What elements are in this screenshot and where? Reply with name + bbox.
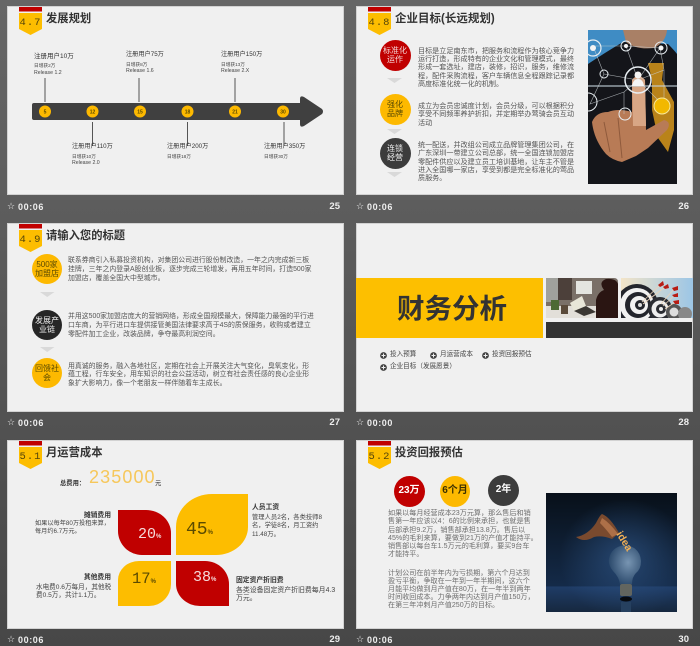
bullet: investment budget: 投入预算 (390, 351, 416, 358)
text: standardised operation: 程，配件采购流程，客户车辆信息全程跟踪记录都 (418, 72, 574, 80)
footer: slide 27: 00:06 (18, 418, 44, 428)
text: plan: 月能平均做到月产值在80万，在一年半到两年 (388, 585, 531, 593)
section badge 5.2 (368, 441, 392, 469)
petal: 45% (176, 494, 248, 555)
timeline arrow: 18 (185, 110, 190, 116)
panel: slide 26 corporate goals (356, 6, 693, 195)
text: break-even: 后部承担9.2万，销售部承担13.8万。售后以 (388, 526, 525, 534)
timeline arrow: 21 (232, 110, 238, 116)
milestone: 75万: 注册用户75万 (126, 51, 164, 58)
section badge 4.8 (368, 7, 391, 35)
heading: financial analysis: 财务分析 (397, 293, 507, 324)
milestone: 110万 (72, 142, 113, 166)
text: plan: 在第三年冲刺月产值250万的目标。 (388, 601, 499, 609)
circle: industry chain: 发展产 (35, 316, 59, 324)
milestone: 200万 (167, 142, 208, 159)
text: depreciation: 各类设备固定资产折旧费每月4.3 (236, 587, 335, 594)
section badge 5.1 (19, 441, 42, 469)
milestone: 75万: Release 1.6 (126, 68, 154, 74)
text: break-even (388, 509, 538, 558)
milestone: 10万: 日增获2万 (34, 63, 55, 68)
text: standardised operation: 运行打造，形成特有的企业文化和管理模式，最终 (418, 55, 574, 63)
text: other costs: 其他费用 (84, 574, 111, 581)
text: salaries: 管理人员2名，各类技师8 (252, 514, 322, 521)
text: amortisation: 如果以每年80万投租来算， (35, 520, 110, 527)
circle: 500 stores (32, 254, 62, 284)
circle: 2年: 2年 (496, 484, 511, 495)
footer: slide 29: 00:06 (18, 635, 44, 645)
milestone: 350万 (264, 142, 305, 159)
petal: 17% (118, 561, 170, 606)
text: brand: 享受不同频率养护折扣，并定期举办莺骑会员互动 (418, 110, 574, 118)
text: break-even: 如果以每月经营成本23万元算，那么售后和销 (388, 509, 531, 517)
panel: slide 30 return estimate (356, 440, 693, 629)
photo: idea light bulb: idea (613, 529, 635, 554)
footer: slide 30 (356, 634, 693, 646)
text: break-even: 售第一年应该以4：6的比例来承担，也就是售 (388, 517, 531, 525)
milestone: 75万: 日增获8万 (126, 62, 147, 67)
text: depreciation (236, 576, 335, 602)
circle: 6个月: 6个月 (442, 485, 468, 496)
heading: 投资回报预估 (395, 447, 463, 459)
total cost figure: 总费用： (60, 480, 85, 487)
photo: hand touching network (588, 30, 677, 184)
circle: chain (380, 138, 410, 168)
footer: slide 30: 30 (678, 634, 689, 645)
text: standardised operation (418, 46, 574, 88)
footer: slide 26 (356, 201, 689, 212)
timeline arrow: 12 (90, 110, 95, 116)
text: 500 stores: 加盟店，覆盖全国大中型城市。 (68, 275, 164, 282)
footer: slide 25: 00:06 (18, 202, 44, 212)
footer: slide 26: 00:06 (367, 202, 393, 212)
text: chain: 广东深圳一带建立公司总部，统一全国连锁加盟店 (418, 149, 574, 157)
milestone: 150万: 日增获13万 (221, 62, 245, 67)
panel: slide 27 (7, 223, 344, 412)
text: chain: 零配件供应以及建立员工培训基地，让车主不管是 (418, 158, 574, 166)
text: salaries: 名，学徒8名，月工资约 (252, 522, 318, 529)
section badge 5.1: 5.1 (20, 451, 41, 463)
timeline arrow: 30 (280, 110, 286, 116)
value: 17%: 17% (132, 570, 156, 588)
photo: archery targets (621, 278, 693, 318)
photo: working on laptop (546, 278, 618, 318)
photo: idea light bulb (546, 493, 677, 612)
text: plan: 盈亏平衡，争取在一年到一年半期间，这六个 (388, 577, 530, 585)
footer: slide 28: 00:00 (367, 418, 393, 428)
section badge 4.9 (19, 224, 42, 252)
footer: slide 29: 29 (329, 634, 340, 645)
footer: slide 28: ☆ (356, 418, 364, 428)
circle: chain: 经营 (387, 153, 403, 162)
footer: slide 27 (7, 417, 340, 428)
bullet: return estimate (482, 350, 532, 359)
text: standardised operation: 形成一套选址，建店，装修，招识，服务，维修流 (418, 63, 574, 71)
bullet: monthly cost (430, 350, 473, 359)
section badge 5.2: 5.2 (369, 451, 390, 463)
text: break-even: 才能持平。 (388, 550, 423, 558)
agenda list (380, 350, 532, 371)
text: other costs: 水电费0.6万每月，其他税 (36, 584, 111, 591)
text: industry chain: 并用这500家加盟店庞大的营销网络，形成全国规模最大，保障能力最强的平行进 (68, 313, 314, 320)
circle: brand: 品牌 (387, 109, 403, 118)
milestone: 200万: 日增获18万 (167, 154, 191, 159)
circle: community: 会 (43, 373, 51, 382)
circle: brand: 强化 (387, 100, 403, 108)
circle: 23万 (394, 476, 424, 506)
circle: 6个月 (440, 476, 470, 506)
milestone: 150万: 注册用户150万 (221, 51, 262, 58)
text: amortisation: 每月约6.7万元。 (35, 528, 81, 535)
text: break-even: 销售部以每台车1.5万元的毛利算，要买9台车 (388, 542, 530, 550)
milestone: 110万: 日增获10万 (72, 154, 96, 159)
circle: industry chain: 业链 (39, 325, 55, 334)
text: industry chain: 零配件加工企业，改装品牌，争夺最高利润空间。 (68, 331, 220, 338)
text: 500 stores (68, 256, 312, 282)
circle: 500 stores: 500家 (36, 260, 58, 268)
circle: brand (380, 94, 410, 124)
heading: 月运营成本 (46, 447, 102, 459)
total cost figure: 235000 (89, 467, 156, 487)
footer: slide 28: 28 (678, 417, 689, 428)
footer: slide 25: ☆ (7, 202, 15, 212)
text: industry chain (68, 312, 314, 338)
footer: slide 25: 25 (329, 201, 340, 212)
milestone: 10万 (34, 52, 74, 76)
text: other costs: 费0.5万，共计1.1万。 (36, 592, 100, 599)
text: brand: 活动 (418, 119, 432, 127)
panel: slide 29 monthly operating cost (7, 440, 344, 629)
section badge 4.8: 4.8 (369, 17, 390, 29)
petal: 20% (118, 510, 170, 555)
text: plan (388, 569, 535, 610)
text: community (68, 362, 309, 387)
yellow title band (356, 278, 543, 338)
text: break-even: 45%的毛利来算，要做到21万的产值才能持平。 (388, 534, 538, 542)
heading: 请输入您的标题 (46, 230, 125, 242)
footer: slide 25 (7, 201, 340, 212)
total cost figure: 元 (155, 480, 161, 487)
milestone: 110万: Release 2.0 (72, 160, 100, 166)
heading: 发展规划 (46, 13, 91, 25)
section badge 4.7 (19, 7, 42, 35)
footer: slide 30: 00:06 (367, 635, 393, 645)
bullet: corporate goals (380, 362, 456, 371)
text: brand: 成立为会员忠诚度计划，会员分级，可以根据积分 (418, 102, 574, 110)
panel: slide 25 development plan (7, 6, 344, 195)
text: salaries: 人员工资 (252, 504, 279, 511)
text: plan: 时间收回成本。力争两年内达到月产值150万， (388, 593, 535, 601)
section badge 4.7: 4.7 (20, 17, 41, 29)
text: 500 stores: 联系券商引入私募投资机构，对集团公司进行股份制改造，一年之内完成新三板 (68, 257, 309, 264)
milestone: 10万: Release 1.2 (34, 70, 62, 76)
milestone: 350万: 注册用户350万 (264, 143, 305, 150)
value: 45%: 45% (186, 520, 213, 540)
circle: standardised operation: 运作 (387, 55, 403, 64)
value: 20%: 20% (138, 526, 161, 543)
text: amortisation: 摊销费用 (84, 512, 111, 519)
timeline arrow: 15 (137, 110, 143, 116)
dark bar (546, 322, 692, 338)
timeline arrow: 5 (44, 110, 47, 116)
text: chain: 质服务。 (418, 174, 446, 182)
circle: community (32, 358, 62, 388)
text: amortisation (35, 511, 111, 535)
timeline arrow (32, 78, 323, 146)
pointer triangles (40, 292, 54, 352)
footer: slide 27: ☆ (7, 418, 15, 428)
footer: slide 27: 27 (329, 417, 340, 428)
footer: slide 29: ☆ (7, 635, 15, 645)
milestone: 350万: 日增获30万 (264, 154, 288, 159)
circle: chain: 连锁 (387, 144, 403, 152)
text: salaries (252, 503, 322, 538)
petal: 38% (176, 561, 229, 606)
milestone: 10万: 注册用户10万 (34, 53, 74, 60)
text: standardised operation: 目标是立足南东市，把服务和流程作为核心竞争力 (418, 46, 574, 54)
text: plan: 计划公司在前半年内为亏损期，第六个月达到 (388, 569, 530, 577)
text: chain (418, 141, 574, 182)
bullet: monthly cost: 月运营成本 (440, 351, 473, 358)
milestone: 150万 (221, 50, 262, 74)
footer: slide 30: ☆ (356, 635, 364, 645)
text: depreciation: 固定资产折旧费 (236, 577, 284, 584)
total cost figure (60, 467, 161, 487)
circle: 500 stores: 加盟店 (35, 269, 59, 278)
circle: standardised operation (380, 40, 410, 70)
pointer triangles (388, 78, 402, 177)
panel: slide 28 section cover (356, 223, 693, 412)
text: depreciation: 万元。 (236, 595, 257, 602)
footer: slide 29 (7, 634, 340, 645)
text: community: 象扩大影响力，像一个老朋友一样伴随着车主成长。 (68, 380, 226, 387)
footer: slide 26: 26 (678, 201, 689, 212)
milestone: 150万: Release 2.X (221, 68, 249, 74)
text: community: 用真诚的服务，融入各地社区，定期在社会上开展关注大气变化，臭氧变化，形 (68, 363, 309, 370)
text: other costs (36, 573, 111, 599)
circle: standardised operation: 标准化 (383, 46, 407, 54)
circle: 23万: 23万 (398, 485, 420, 496)
bullet: investment budget (380, 350, 416, 359)
text: industry chain: 口车商，为平行进口车提供接管美国法律要求高于4S的质保服务，收购或者建立 (68, 322, 311, 329)
text: community: 蕴工程，行车安全，用车知识的社会公益活动，树立有社会责任感的良心企业形 (68, 371, 309, 378)
circle: industry chain (32, 310, 62, 340)
bullet: return estimate: 投资回报预估 (492, 351, 532, 358)
bullet: corporate goals: 企业目标（发展愿景） (390, 363, 456, 370)
text: brand (418, 102, 574, 127)
text: salaries: 11.48万。 (252, 531, 280, 538)
milestone: 110万: 注册用户110万 (72, 143, 113, 150)
text: chain: 统一配送，并改组公司成立品牌管理集团公司，在 (418, 141, 574, 149)
heading: 企业目标(长远规划) (395, 13, 495, 25)
milestone: 75万 (126, 50, 164, 74)
text: standardised operation: 高度标准化统一化的机制。 (418, 80, 503, 88)
text: chain: 进入全国哪一家店，享受到都是完全标准化的莺品 (418, 166, 574, 174)
milestone: 200万: 注册用户200万 (167, 143, 208, 150)
section badge 4.9: 4.9 (20, 234, 41, 246)
footer: slide 28 (356, 417, 689, 428)
text: 500 stores: 挂牌，三年之内登录A股创业板，逐步完成三轮增发，再用五年时间，打造500家 (68, 266, 311, 273)
circle: community: 回馈社 (35, 364, 59, 372)
circle: 2年 (488, 474, 519, 506)
value: 38%: 38% (193, 569, 216, 586)
footer: slide 26: ☆ (356, 202, 364, 212)
